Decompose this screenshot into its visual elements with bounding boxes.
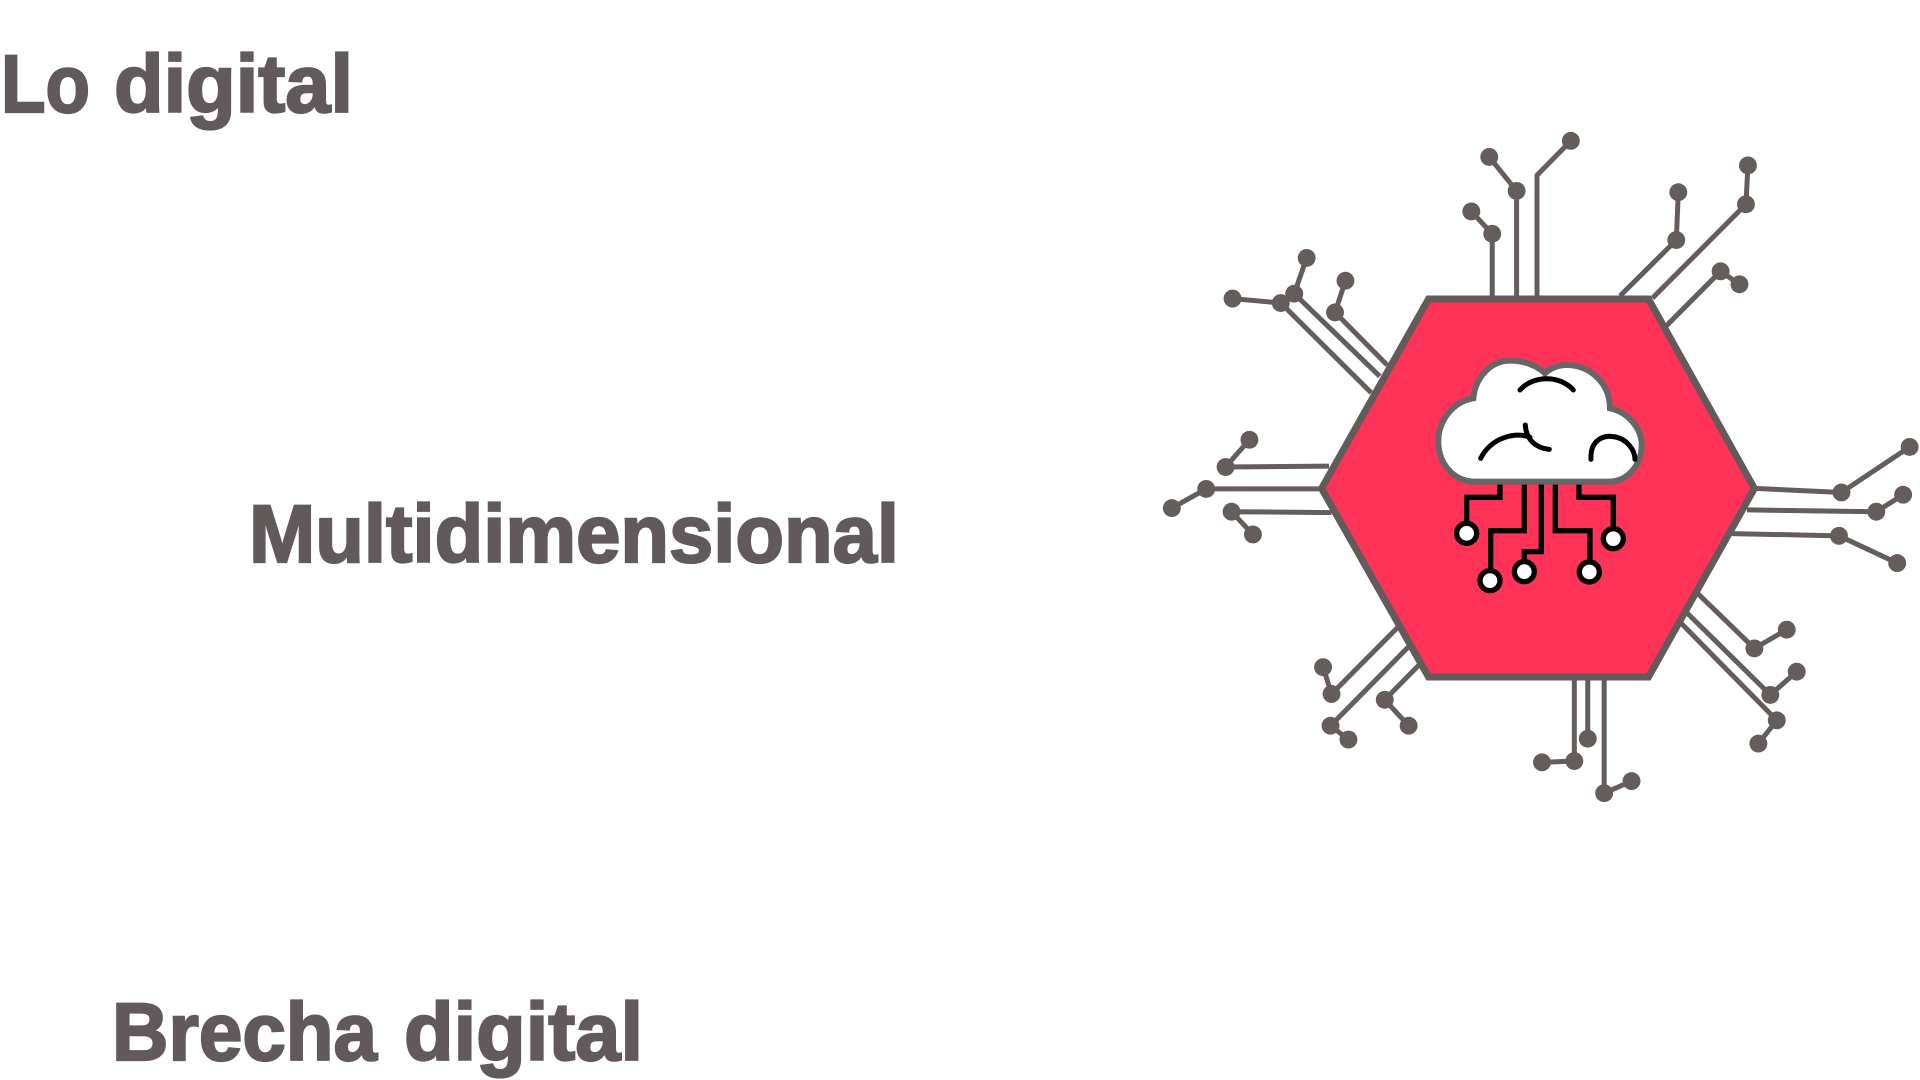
heading: Lo digital: digital <box>114 39 353 130</box>
icon: circuit hexagon with cloud <box>1163 132 1919 802</box>
heading: Lo digital: Lo <box>1 39 90 130</box>
cloud inner curves <box>1481 379 1635 459</box>
heading: Brecha digital: digital <box>404 987 643 1078</box>
heading: Lo digital <box>1 39 353 130</box>
red hexagon <box>1322 299 1754 677</box>
circuit traces around hexagon <box>1163 132 1919 802</box>
cloud with circuit <box>1438 361 1642 591</box>
cloud outline <box>1438 361 1642 482</box>
circuit lines and nodes <box>1457 484 1623 591</box>
heading: Multidimensional: Multidimensional <box>249 489 899 580</box>
heading: Brecha digital <box>112 987 643 1078</box>
heading: Brecha digital: Brecha <box>112 987 378 1078</box>
